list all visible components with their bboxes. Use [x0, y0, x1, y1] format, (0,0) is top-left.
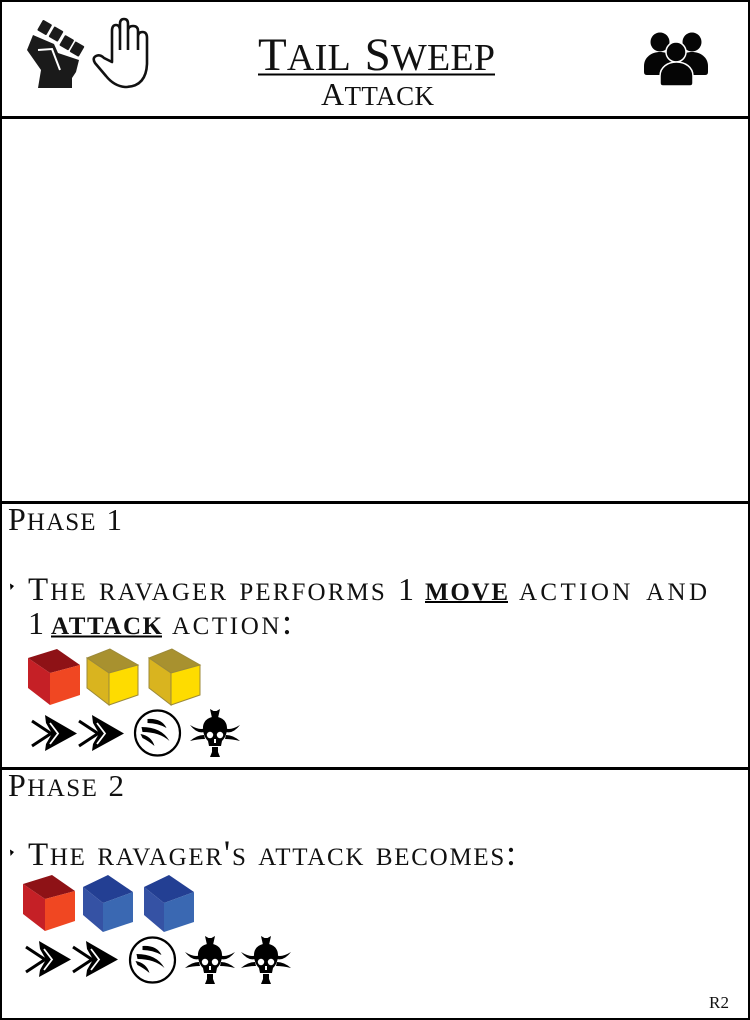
card code: R2 — [709, 993, 729, 1012]
icon: raised fist — [27, 20, 85, 88]
icon: group of people — [644, 32, 708, 86]
heading: phase 1: Phase 1 — [8, 499, 122, 538]
attack symbols — [26, 936, 291, 984]
subtitle: Attack — [321, 71, 434, 114]
panel: phase 2 — [0, 765, 750, 984]
heading: phase 2: Phase 2 — [8, 765, 124, 804]
text: move and attack rule: The ravager performs 1 — [28, 568, 414, 608]
text: move and attack rule: attack — [51, 602, 163, 642]
icon: open hand — [94, 19, 147, 87]
text: move and attack rule — [28, 568, 707, 642]
panel: empty artwork area — [2, 119, 748, 501]
bullet — [10, 850, 14, 856]
panel: phase 1 — [0, 499, 750, 757]
dice: red and two yellow — [28, 649, 200, 705]
text: move and attack rule: move — [425, 568, 508, 608]
text: move and attack rule: 1 — [28, 605, 44, 641]
text: move and attack rule: action: — [172, 602, 292, 642]
panel: header — [0, 19, 750, 118]
bullet — [10, 584, 14, 590]
dice: red and two blue — [23, 875, 194, 932]
text: attack change: The ravager's attack becomes: — [28, 833, 516, 873]
text: move and attack rule: action and — [519, 568, 707, 608]
title: Tail Sweep — [258, 22, 495, 82]
attack symbols — [32, 709, 240, 757]
